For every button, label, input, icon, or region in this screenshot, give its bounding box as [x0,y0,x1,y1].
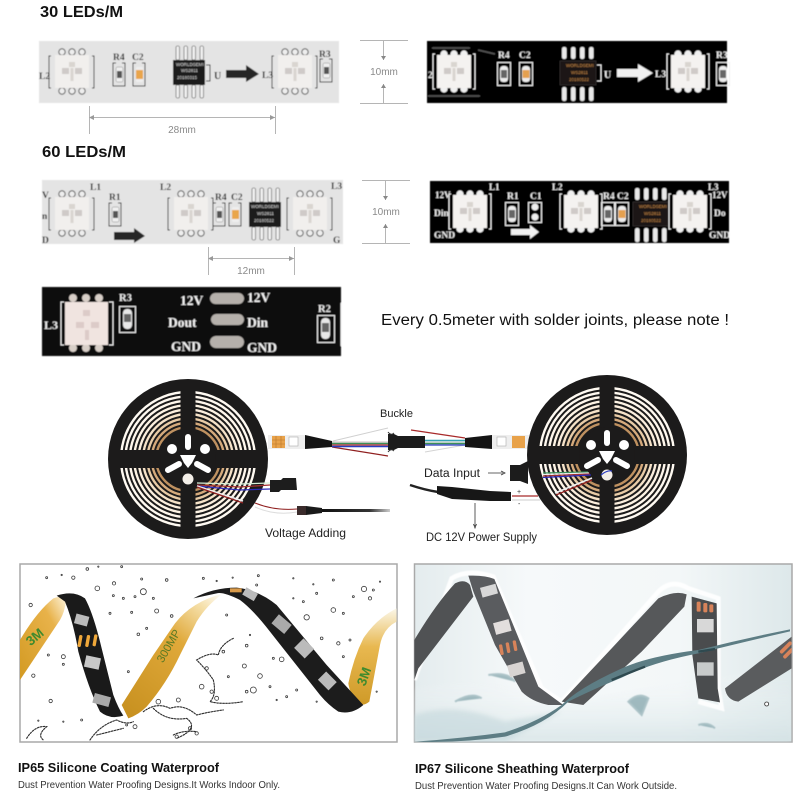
resistor R3 [716,51,730,86]
resistor R3: R3 [319,50,331,60]
panel: 60 LEDs/M black strip [430,181,730,243]
left cable connector [270,478,297,492]
arrow [226,65,259,82]
chip: 20180522 [641,218,662,223]
wire bundle: left [332,428,388,456]
dimension: 12mm: 12mm [237,266,265,277]
note text: Every 0.5meter with solder joints, please note ! [381,312,729,329]
resistor R4: R4 [113,53,125,63]
LED L3 [44,294,113,352]
LED and pad details [480,584,792,677]
arrow: power supply [474,503,476,528]
power plug [410,485,540,508]
arrow: data input [488,471,505,475]
reel: left [108,379,297,539]
LED L3: L3 [331,182,342,192]
droplet [765,702,769,706]
tape print: middle: 300MP [155,628,183,665]
strip: left black [57,593,123,717]
resistor R3 [319,50,332,82]
resistor R1: R1 [507,192,519,202]
heading: 60 LEDs/M: 60 LEDs/M [42,144,126,161]
heading: IP65: IP65 Silicone Coating Waterproof [18,760,220,775]
capacitor C2 [229,193,243,226]
hole wire [601,471,612,475]
resistor R4: R4 [498,51,510,61]
ribbon: middle back [562,593,687,705]
chip: U [604,70,611,81]
resistor R4: R4 [603,192,615,202]
strip components [74,587,337,707]
capacitor C2 [132,53,145,86]
capacitor C1 [528,192,542,222]
chip: WORLDSEMI [566,63,594,68]
labels 12V Din GND [434,190,455,241]
LED L2: L2 [552,182,563,192]
pin labels: 12V [247,290,270,305]
labels 12V Din GND: 12V [435,190,451,200]
LED L3 [262,49,317,94]
LED L1: D [42,236,49,246]
caption: IP65: Dust Prevention Water Proofing Designs.It Works Indoor Only. [18,779,280,791]
panel: solder joint strip [42,287,341,356]
capacitor C2: C2 [617,192,629,202]
chip [249,188,281,240]
adhesive tape: middle [122,593,223,718]
resistor R4 [498,51,510,86]
arrow [617,64,653,82]
tape print: left: 3M [23,625,47,649]
LED [428,50,475,93]
tape print: right: 3M [354,665,374,688]
resistor R1 [506,192,519,226]
labels 12V Din GND: Din [434,209,450,219]
capacitor C1: C1 [530,192,542,202]
labels 12V Do GND: 12V [712,190,728,200]
resistor R1 [109,193,121,226]
dimension: 28mm: 28mm [168,125,196,136]
reel: right [527,375,687,535]
adhesive tape: left [20,597,66,680]
capacitor C2 [519,51,532,86]
wire bundle: right [411,430,465,452]
LED L3: L3 [655,70,666,80]
heading: IP67: IP67 Silicone Sheathing Waterproof [415,761,630,776]
resistor R1: R1 [109,193,121,203]
chip: WS2811 [644,211,661,216]
dimension: 10mm, 60 LEDs/M: 10mm [372,207,400,218]
data input connector [510,461,528,484]
ribbon: middle front [692,597,720,702]
pin labels: 12V [180,293,204,308]
panel: 60 LEDs/M white strip [42,180,343,246]
labels 12V Do GND: Do [714,209,726,219]
pin labels: GND [171,339,201,354]
LED L3: L3 [44,318,58,332]
LED L2 [160,183,213,236]
wires to data connector [543,472,592,495]
resistor R2 [318,303,341,346]
LED L3: L3 [708,182,719,192]
resistor R3: R3 [716,51,728,61]
ribbon: left front [468,576,563,705]
LED L1 [449,182,500,233]
pin labels: Dout [168,315,197,330]
strip: long black [193,588,363,712]
chip WS2811: U [214,71,221,82]
dimension: 12mm [208,247,294,277]
LED L1: n [42,212,48,222]
resistor R2: R2 [318,304,331,315]
water stream [415,629,790,742]
LED L1: L1 [489,182,500,192]
resistor R4: R4 [215,193,227,203]
resistor R3: R3 [119,293,132,304]
chip: WORLDSEMI [251,204,279,209]
pin labels: GND [247,340,277,355]
capacitor C2: C2 [519,51,531,61]
arrow [511,225,539,239]
dimension: 10mm, 60 LEDs/M [362,180,410,244]
LED L2 [39,49,94,94]
label: DC 12V Power Supply: DC 12V Power Supply [426,532,537,544]
solder joints [210,293,244,348]
label: Buckle: Buckle [380,408,413,420]
LED L1: L1 [90,183,101,193]
chip: WORLDSEMI [639,204,667,209]
adhesive tape: right [348,608,397,705]
chip [633,188,669,242]
resistor R3 [119,293,136,332]
label: Data Input: Data Input [424,468,481,480]
ribbon: left back [414,581,473,680]
buckle connector [388,432,425,452]
capacitor C2 [616,192,629,226]
chip: 20180522 [254,218,275,223]
chip [560,47,611,101]
LED L3 [669,182,719,233]
panel: IP67 photo [414,564,792,742]
panel: 30 LEDs/M white strip [39,41,339,103]
resistor R4 [113,53,125,86]
labels 12V Din GND: GND [434,231,455,241]
chip WS2811: WORLDSEMI [176,62,204,67]
caption: IP67: Dust Prevention Water Proofing Designs.It Can Work Outside. [415,780,677,792]
label: Voltage Adding: Voltage Adding [265,526,346,540]
panel: IP65 photo [20,564,397,742]
labels 12V Do GND [709,190,730,241]
chip: WS2811 [257,211,274,216]
chip WS2811: 20180315 [177,75,198,80]
water drops [29,566,381,738]
capacitor C2: C2 [132,53,144,63]
LED L2: L2 [160,183,171,193]
dimension: 28mm [89,106,276,136]
chip WS2811: WS2811 [181,68,198,73]
LED L1: V [42,191,49,201]
pin labels: Din [247,315,268,330]
ribbon: right [725,637,792,702]
power plug: + [517,489,521,496]
dimension: 10mm, 30 LEDs/M: 10mm [370,67,398,78]
chip: WS2811 [571,70,588,75]
dimension: 10mm, 30 LEDs/M [360,40,408,104]
heading: 30 LEDs/M: 30 LEDs/M [40,4,123,21]
silicone sheath halo [414,573,722,708]
chip WS2811 [173,46,221,98]
pin labels [168,290,277,355]
power plug: - [518,501,521,508]
LED L3: G [333,236,341,246]
strip connector: right [465,435,529,449]
LED L3: L3 [262,71,273,81]
capacitor C2: C2 [231,193,243,203]
LED L2 [552,182,602,233]
labels 12V Do GND: GND [709,231,730,241]
arrow [114,228,145,243]
strip connector: left [268,435,332,449]
LED: 2 [428,71,433,81]
LED L2: L2 [39,72,50,82]
power lead: left [255,503,390,515]
splash clusters [27,638,243,740]
resistor R4 [602,192,615,226]
chip: 20180522 [569,77,590,82]
wires to left connector [197,483,270,503]
LED L1 [42,183,101,246]
resistor R4 [213,193,227,226]
LED L3 [287,182,342,246]
water wash [414,690,792,742]
panel: 30 LEDs/M black strip [427,41,730,103]
LED L3 [655,50,709,93]
